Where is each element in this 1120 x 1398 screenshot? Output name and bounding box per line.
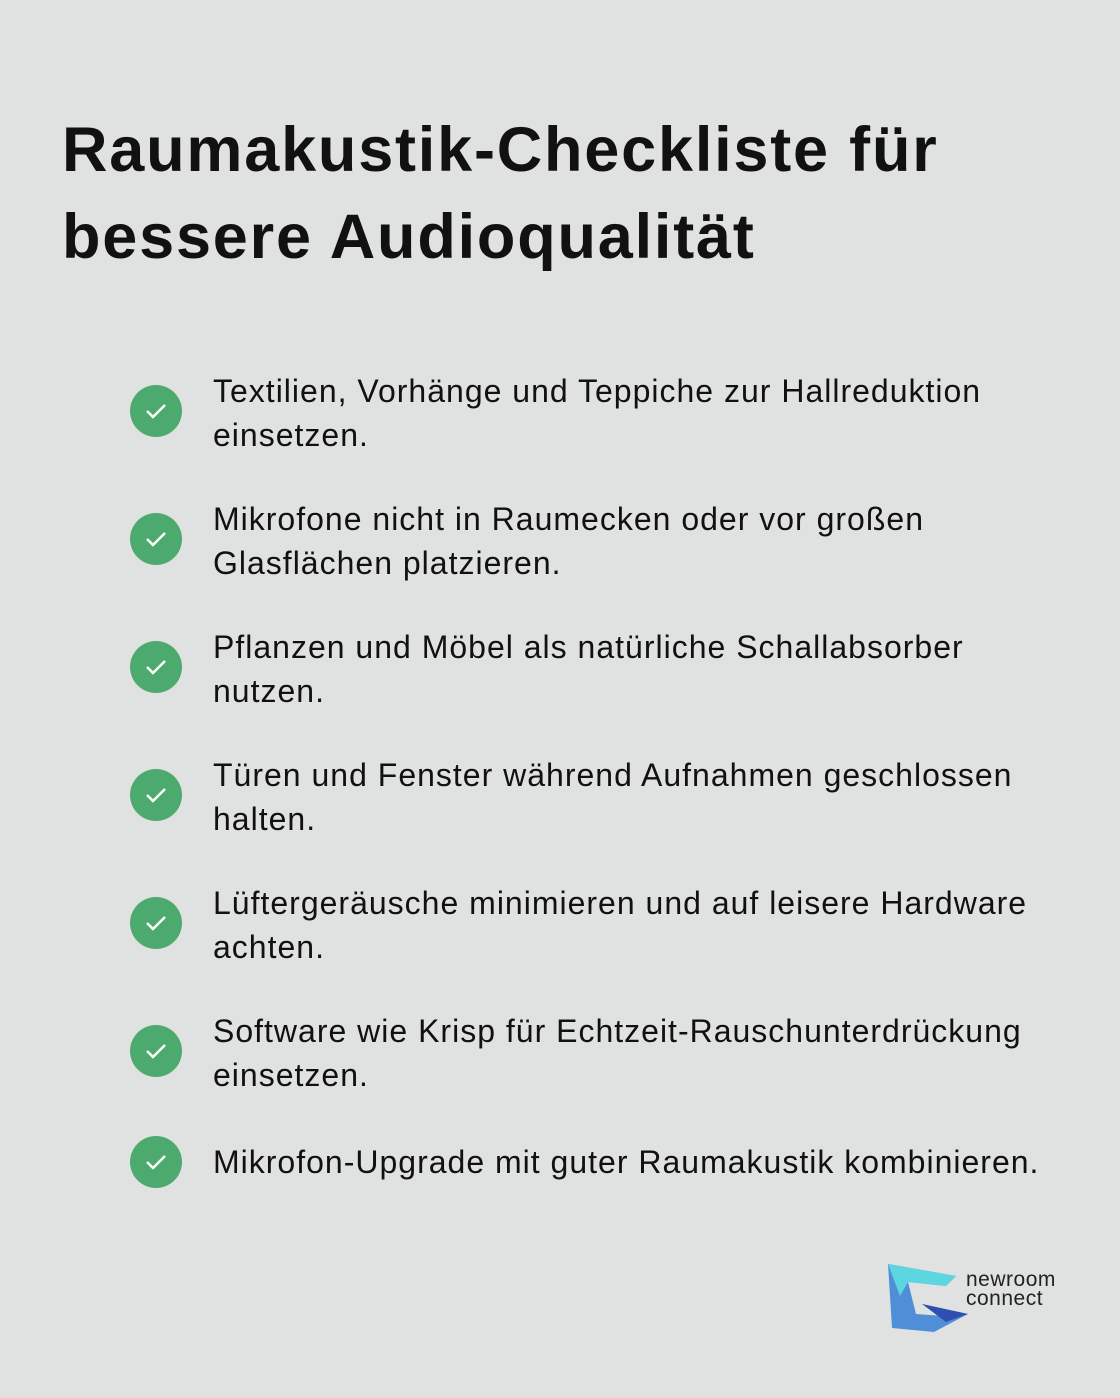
text: einsetzen. [213, 417, 369, 453]
icon: check [130, 513, 182, 565]
icon: check [130, 385, 182, 437]
logo text [966, 1268, 1056, 1310]
icon: check [130, 1025, 182, 1077]
text: einsetzen. [213, 1057, 369, 1093]
text: achten. [213, 929, 325, 965]
text [213, 1013, 1022, 1093]
text [213, 885, 1027, 965]
logo [888, 1264, 1056, 1332]
icon: check [130, 1136, 182, 1188]
item 4 [130, 757, 1012, 837]
title: bessere Audioqualität [62, 202, 756, 272]
item 1 [130, 373, 981, 453]
text: Lüftergeräusche minimieren und auf leisere Hardware [213, 885, 1027, 921]
text: nutzen. [213, 673, 325, 709]
text [213, 629, 964, 709]
item 7 [130, 1136, 1039, 1188]
text: Glasflächen platzieren. [213, 545, 562, 581]
item 5 [130, 885, 1027, 965]
text: Mikrofone nicht in Raumecken oder vor großen [213, 501, 924, 537]
text: Türen und Fenster während Aufnahmen geschlossen [213, 757, 1012, 793]
item 2 [130, 501, 924, 581]
text [213, 373, 981, 453]
icon: check [130, 641, 182, 693]
text: halten. [213, 801, 316, 837]
title [62, 115, 939, 272]
icon: check [130, 769, 182, 821]
text: Mikrofon-Upgrade mit guter Raumakustik kombinieren. [213, 1144, 1039, 1180]
logo text: newroom [966, 1268, 1056, 1291]
item 6 [130, 1013, 1022, 1093]
text [213, 757, 1012, 837]
text: Textilien, Vorhänge und Teppiche zur Hallreduktion [213, 373, 981, 409]
title: Raumakustik-Checkliste für [62, 115, 939, 185]
item 3 [130, 629, 964, 709]
logo mark [888, 1264, 968, 1332]
text: Software wie Krisp für Echtzeit-Rauschunterdrückung [213, 1013, 1022, 1049]
text [213, 501, 924, 581]
text: Pflanzen und Möbel als natürliche Schallabsorber [213, 629, 964, 665]
logo text: connect [966, 1287, 1043, 1310]
icon: check [130, 897, 182, 949]
